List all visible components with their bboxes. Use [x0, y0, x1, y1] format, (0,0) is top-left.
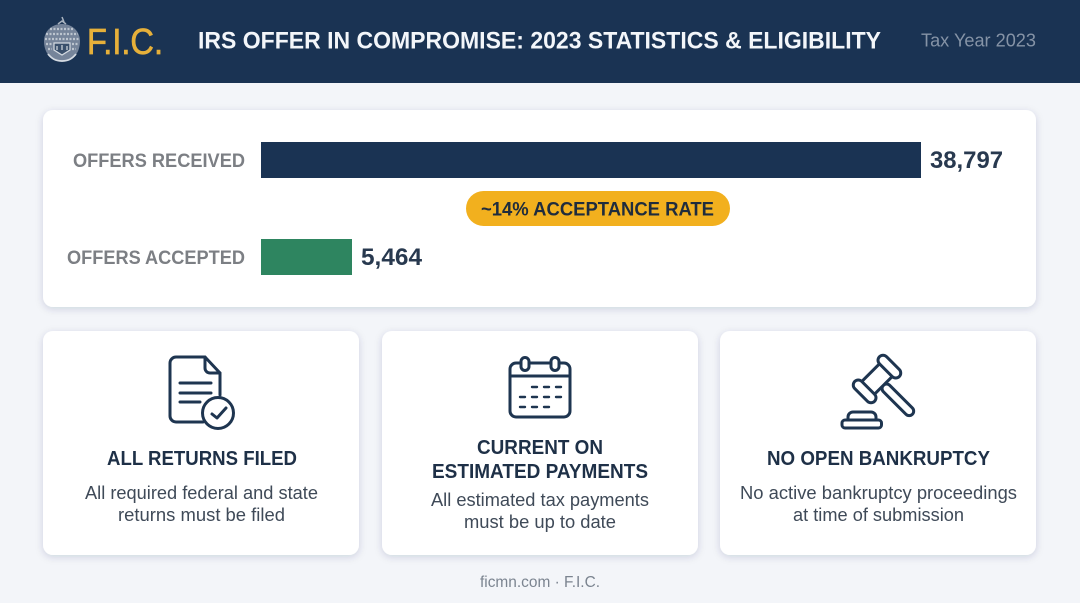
description: No active bankruptcy proceedings	[740, 483, 1017, 503]
description: All required federal and state	[85, 483, 318, 503]
heading	[432, 436, 648, 483]
description	[431, 490, 649, 532]
description: All estimated tax payments	[431, 490, 649, 510]
logo wordmark: F.I.C.	[87, 21, 163, 62]
panel: current on estimated payments	[382, 331, 698, 555]
footer: ficmn.com · F.I.C.	[480, 574, 600, 591]
bar: offers accepted	[261, 239, 352, 275]
panel: no open bankruptcy	[720, 331, 1036, 555]
panel: offer statistics	[43, 110, 1036, 307]
title: IRS OFFER IN COMPROMISE: 2023 STATISTICS & ELIGIBILITY	[198, 28, 881, 54]
value: offers received: 38,797	[930, 147, 1003, 174]
description	[85, 483, 318, 525]
heading: ALL RETURNS FILED	[107, 447, 297, 470]
tax year label: Tax Year 2023	[921, 30, 1036, 50]
description: must be up to date	[464, 512, 616, 532]
description: at time of submission	[793, 505, 964, 525]
panel: all returns filed	[43, 331, 359, 555]
heading: CURRENT ON	[477, 436, 603, 459]
heading: ESTIMATED PAYMENTS	[432, 460, 648, 483]
description	[740, 483, 1017, 525]
value: offers accepted: 5,464	[361, 244, 423, 271]
description: returns must be filed	[118, 505, 285, 525]
callout: acceptance rate: ~14% ACCEPTANCE RATE	[481, 198, 714, 220]
callout: acceptance rate	[466, 191, 730, 226]
bar: offers received	[261, 142, 921, 178]
header band	[0, 0, 1080, 83]
icon: F.I.C. crest logo	[44, 17, 80, 62]
heading: NO OPEN BANKRUPTCY	[767, 447, 990, 470]
label: offers received: OFFERS RECEIVED	[73, 150, 245, 172]
icon: gavel	[842, 353, 928, 430]
icon: calendar	[510, 358, 570, 417]
label: offers accepted: OFFERS ACCEPTED	[67, 247, 245, 269]
icon: document with check	[170, 357, 234, 428]
